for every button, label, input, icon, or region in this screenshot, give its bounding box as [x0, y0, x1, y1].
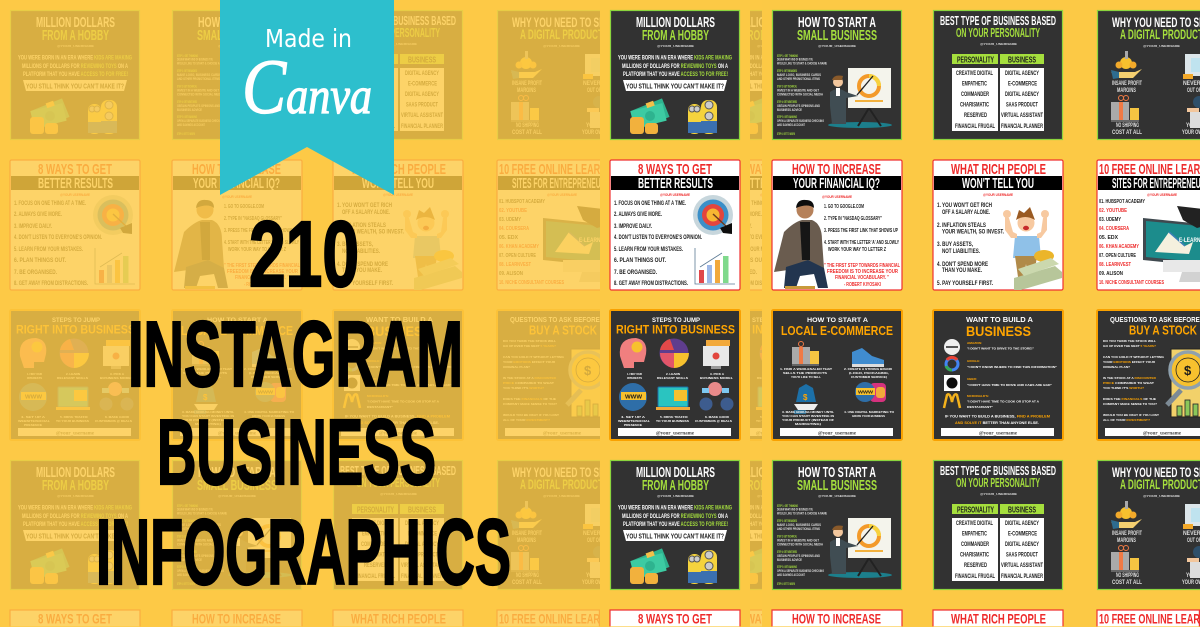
icon labels: PRESENCE	[624, 423, 642, 427]
question text: YOU THINK IT'S WORTH?	[1103, 386, 1144, 390]
icon labels: 3. PICK A	[710, 372, 724, 376]
step list: OPEN A SEPARATE BUSINESS CHECKING	[777, 119, 824, 123]
question text	[1103, 339, 1165, 422]
brand quotes: "I DON'T HAVE TIME TO COOK OR STOP AT A	[967, 400, 1040, 404]
numbered list: 5. LEARN FROM YOUR MISTAKES.	[614, 246, 683, 253]
icon labels: CUSTOMERS @ DEALS	[695, 419, 732, 423]
icon labels: MARGINS	[1117, 88, 1136, 94]
card heading: BEST TYPE OF BUSINESS BASED	[940, 13, 1056, 28]
table: personality and business: COMMANDER	[961, 92, 989, 98]
icon labels	[618, 372, 733, 427]
brand quotes: MCDONALD'S:	[967, 394, 989, 398]
photo: seated man in blazer	[774, 200, 828, 289]
card heading	[792, 161, 881, 192]
title: 210	[249, 202, 359, 306]
icon labels: WEBSITE/SOCIAL	[618, 419, 650, 423]
card: how to start a small business: @YOUR_USERNAME	[818, 44, 856, 48]
numbered list: OFF A SALARY ALONE.	[942, 209, 990, 216]
card heading: HOW TO START A	[807, 317, 868, 324]
card heading	[940, 13, 1056, 40]
card: best type of business based on your personality	[933, 10, 1063, 140]
step list: BUSINESS ADVICE	[777, 108, 802, 112]
numbered list: 2. ALWAYS GIVE MORE.	[614, 211, 662, 218]
quote: - ROBERT KIYOSAKI	[844, 282, 881, 288]
numbered list: 10. NICHE CONSULTANT COURSES	[1099, 280, 1164, 286]
card: how to start a local e-commerce	[772, 310, 902, 440]
icon: blue shoe	[852, 348, 884, 367]
icon labels: 2. LEARN	[666, 372, 680, 376]
table: personality and business: FINANCIAL FRUGAL	[955, 124, 995, 130]
icon: monitor	[1183, 54, 1200, 79]
ribbon logo text: canva: Canva	[242, 43, 372, 130]
numbered list: 8. GET AWAY FROM DISTRACTIONS.	[614, 280, 688, 287]
conclusion text: IF YOU WANT TO BUILD A BUSINESS, FIND A PROBLEM	[945, 414, 1050, 418]
body text: PLATFORM THAT YOU HAVE ACCESS TO FOR FREE!	[623, 71, 728, 78]
icon labels: 5. DRIVE TRAFFIC	[660, 415, 688, 419]
step list: STEP 2: GET BRANDED	[777, 69, 797, 73]
numbered list: 1. FOCUS ON ONE THING AT A TIME.	[614, 200, 686, 207]
card heading	[636, 14, 715, 44]
table: personality and business: EMPATHETIC	[962, 82, 987, 88]
step list: WOULD LIKE TO START & CHOOSE A NAME	[777, 62, 827, 66]
question text: ALL OF YOUR INVESTMENT?	[1103, 418, 1150, 422]
numbered list: 1. GO TO GOOGLE.COM	[824, 204, 864, 210]
body text	[618, 54, 732, 78]
card: million dollars from a hobby	[610, 10, 740, 140]
card heading	[1099, 161, 1200, 192]
card: best type of business based on your personality: @YOUR_USERNAME	[980, 42, 1017, 46]
card: how to increase your financial iq	[772, 160, 902, 290]
icon labels: INSANE PROFIT	[1112, 81, 1142, 87]
step text: YOU CAN START INVESTING IN	[782, 414, 834, 418]
table: personality and business: RESERVED	[964, 113, 987, 119]
step list: STEP 3: GET TECHNICAL	[777, 84, 797, 88]
numbered list: 01. HUBSPOT ACADEMY	[1099, 199, 1145, 205]
table: personality and business: E-COMMERCE	[1008, 82, 1037, 88]
title: INFOGRAPHICS	[96, 500, 511, 604]
step list: CONNECTED WITH SOCIAL MEDIA	[777, 92, 823, 96]
card heading: HOW TO START A	[798, 14, 876, 31]
brand quotes: RESTAURANT"	[967, 405, 994, 409]
step text: (LOGO, PACKAGING,	[849, 371, 889, 375]
numbered list	[1099, 199, 1164, 286]
icon: hand with coins	[1111, 51, 1142, 79]
card heading: WON'T TELL YOU	[962, 175, 1034, 192]
icon labels: 4. SET UP A	[621, 415, 645, 419]
cards: cropped heading row five	[610, 610, 1200, 626]
table: personality and business: CHARISMATIC	[960, 102, 989, 108]
table: personality and business: BUSINESS	[1008, 56, 1036, 64]
card heading: STEPS TO JUMP	[652, 317, 701, 324]
card heading: LOCAL E-COMMERCE	[781, 324, 893, 338]
step text: 3. MAKE ENOUGH MONEY UNTIL	[782, 410, 834, 414]
card: why you need to sell a digital product: @YOUR_USERNAME	[1143, 44, 1180, 48]
numbered list	[937, 202, 1004, 287]
icon row: head, puzzle, store	[620, 338, 730, 369]
question text: CAN YOU HOLD IT WITHOUT LETTING	[1103, 355, 1165, 359]
brand quotes: "I DON'T WANT TO DRIVE TO THE STORE!"	[967, 346, 1035, 350]
icon: person with laptop	[1187, 96, 1200, 128]
card heading	[781, 317, 893, 338]
numbered list: 2. TYPE IN "NASDAQ GLOSSARY"	[824, 216, 882, 222]
icon labels: NO SHIPPING	[1116, 123, 1139, 129]
step list	[777, 54, 827, 136]
step list: DESIGN WHAT KIND OF BUSINESS YOU	[777, 58, 813, 62]
numbered list: 7. BE ORGANISED.	[614, 269, 657, 276]
question text: YOUR EMOTIONS EFFECT YOUR	[1103, 360, 1156, 364]
icon labels: BUSINESS MODEL	[700, 376, 733, 380]
step list: STEP 6: GET TO WORK	[777, 132, 795, 136]
step list: STEP 4: GET MENTORED	[777, 100, 797, 104]
card: 8 ways to get better results: @YOUR USERNAME	[660, 193, 691, 197]
numbered list: 3. PRESS THE FIRST LINK THAT SHOWS UP	[824, 228, 898, 234]
step text: SELLS THE PRODUCTS	[783, 371, 827, 375]
card heading: YOUR FINANCIAL IQ?	[793, 175, 880, 192]
cards: repeated row four	[610, 460, 1200, 590]
brand quotes: "I DON'T KNOW WHERE TO FIND THIS INFORMATION"	[967, 365, 1058, 369]
numbered list: 3. BUY ASSETS,	[937, 241, 973, 248]
conclusion text	[945, 414, 1050, 425]
title	[96, 202, 511, 604]
question text: PRICE COMPARED TO WHAT	[1103, 381, 1154, 385]
card heading: ON YOUR PERSONALITY	[956, 25, 1040, 40]
username bar: @your_username	[979, 430, 1018, 436]
card: 10 free online learning sites	[1097, 160, 1200, 290]
card: why you need to sell a digital product	[1097, 10, 1200, 140]
question text: COMPANY MAKE SENSE TO YOU?	[1103, 402, 1157, 406]
card heading	[951, 161, 1046, 192]
brand quotes: UBER:	[967, 377, 977, 381]
card heading: FROM A HOBBY	[642, 27, 709, 44]
table: personality and business: DIGITAL AGENCY	[1005, 92, 1039, 98]
step list: AND SAVINGS ACCOUNT	[777, 123, 806, 127]
card heading	[966, 317, 1033, 339]
table: personality and business: CREATIVE DIGITAL	[956, 71, 993, 77]
icon: delivery truck	[792, 342, 819, 366]
card: 8 ways to get better results	[610, 160, 740, 290]
question text: IS THE STOCK AT A DISCOUNTED	[1103, 376, 1157, 380]
card heading: BETTER RESULTS	[638, 175, 713, 192]
question text: GO UP OVER THE NEXT 5 YEARS?	[1103, 344, 1156, 348]
table: personality and business: PERSONALITY	[957, 56, 994, 64]
numbered list: WORK YOUR WAY TO LETTER Z	[828, 247, 886, 253]
card heading: WHAT RICH PEOPLE	[951, 161, 1046, 178]
brand quotes: "I DON'T HAVE TIME TO DRIVE AND CABS ARE BAD"	[967, 383, 1053, 387]
cards: cropped heading row five: HOW TO INCREASE	[792, 610, 881, 626]
numbered list: 02. YOUTUBE	[1099, 208, 1127, 214]
quote	[824, 263, 900, 288]
icon: target with dart	[693, 195, 733, 235]
card heading: BUSINESS	[966, 323, 1031, 339]
card: steps to jump right into business	[610, 310, 740, 440]
numbered list: 07. OPEN CULTURE	[1099, 253, 1136, 259]
step text	[780, 367, 895, 426]
table: personality and business: SAAS PRODUCT	[1006, 102, 1038, 108]
icon: minions	[688, 100, 717, 134]
card: million dollars from a hobby: @YOUR_USERNAME	[657, 44, 694, 48]
card heading: RIGHT INTO BUSINESS	[616, 322, 735, 336]
numbered list: THAN YOU MAKE.	[942, 267, 982, 274]
numbered list	[614, 200, 702, 287]
username bar: @your_username	[1143, 430, 1182, 436]
numbered list: NOT LIABILITIES.	[942, 248, 980, 255]
cards: cropped heading row five: 8 WAYS TO GET	[638, 610, 712, 626]
icon: money and coins	[630, 98, 670, 134]
title: BUSINESS	[157, 400, 436, 504]
card: how to increase your financial iq: @YOUR USERNAME	[822, 195, 853, 199]
card heading: WANT TO BUILD A	[966, 317, 1033, 324]
brand quotes	[967, 341, 1058, 409]
numbered list: 4. DON'T LISTEN TO EVERYONE'S OPINION.	[614, 234, 702, 241]
table: personality and business	[952, 54, 1044, 131]
cards: cropped heading row five: WHAT RICH PEOPLE	[951, 610, 1046, 626]
numbered list: 03. UDEMY	[1099, 217, 1121, 223]
card heading	[638, 161, 713, 192]
card: want to build a business	[933, 310, 1063, 440]
card heading: 8 WAYS TO GET	[638, 161, 712, 178]
step text: 1. FIND A WHOLESALER THAT	[780, 367, 832, 371]
numbered list: 08. LEARNVEST	[1099, 262, 1131, 268]
username bar: @your_username	[818, 430, 857, 436]
table: personality and business: FINANCIAL PLANNER	[1001, 124, 1043, 130]
card: how to start a small business	[772, 10, 902, 140]
quote: " THE FIRST STEP TOWARDS FINANCIAL	[824, 263, 900, 269]
ribbon: made in canva	[220, 0, 394, 195]
callout banner: YOU STILL THINK YOU CAN'T MAKE IT?	[626, 82, 724, 90]
question text: ORIGINAL PLAN?	[1103, 365, 1130, 369]
card heading: HOW TO INCREASE	[792, 161, 881, 178]
step text: 4. USE DIGITAL MARKETING TO	[844, 410, 895, 414]
card heading	[616, 317, 735, 336]
icon: delivery truck	[1111, 96, 1139, 122]
ribbon text: made in: Made in	[265, 24, 352, 53]
numbered list: 4. START WITH THE LETTER 'A' AND SLOWLY	[824, 240, 899, 246]
icon labels: 1. FIND YOUR	[627, 372, 642, 376]
card: 10 free online learning sites: @YOUR USERNAME	[1147, 193, 1178, 197]
card heading: SMALL BUSINESS	[797, 27, 877, 44]
numbered list: 3. IMPROVE DAILY.	[614, 223, 652, 230]
step text: 2. CREATE A STRONG BRAND	[844, 367, 892, 371]
numbered list: 06. KHAN ACADEMY	[1099, 244, 1139, 250]
icon labels: TO YOUR BUSINESS	[656, 419, 689, 423]
step text: MARKETING)	[795, 422, 821, 426]
step text: CUSTOMER SERVICE)	[851, 375, 887, 379]
body text: MILLIONS OF DOLLARS FOR REVIEWING TOYS ON A	[622, 63, 728, 70]
question text: DOES THE FINANCIALS OF THE	[1103, 397, 1156, 401]
card heading	[1112, 14, 1200, 42]
numbered list: 09. ALISON	[1099, 271, 1123, 277]
icon: amazon, google, uber, mcdonalds logos	[944, 339, 960, 408]
card: what rich people won't tell you: @YOUR USERNAME	[983, 193, 1014, 197]
card: what rich people won't tell you	[933, 160, 1063, 290]
quote: FINANCIAL VOCABULARY. "	[835, 275, 889, 281]
icon labels: INTERESTS	[627, 376, 642, 380]
step list: OBTAIN PEOPLE'S OPINIONS AND	[777, 104, 820, 108]
icon: excited man with money	[1003, 207, 1062, 290]
icon: hand holding money bag: $	[803, 393, 808, 402]
card: questions to ask before you buy a stock	[1097, 310, 1200, 440]
icon labels: 6. MAKE GOOD	[705, 415, 729, 419]
step list: INVEST IN A WEBSITE AND GET	[777, 88, 820, 92]
numbered list: 5. PAY YOURSELF FIRST.	[937, 280, 993, 287]
brand quotes: GOOGLE:	[967, 359, 980, 363]
step text: YOU'D LIKE TO SELL	[791, 375, 821, 379]
numbered list: 4. DON'T SPEND MORE	[937, 261, 988, 268]
icon: magnifier over bar chart: $	[1184, 363, 1192, 378]
question text: WOULD YOU BE OKAY IF YOU LOST	[1103, 413, 1159, 417]
body text: YOU WERE BORN IN AN ERA WHERE KIDS ARE MAKING	[618, 54, 732, 62]
step list: MAKE LOGO, BUSINESS CARDS	[777, 73, 821, 77]
numbered list: 05. EDX	[1099, 235, 1118, 241]
panel: faded infographic grid behind the title	[0, 0, 627, 627]
step text: GROW YOUR BUSINESS	[852, 414, 885, 418]
card heading: MILLION DOLLARS	[636, 14, 715, 31]
numbered list: YOUR WEALTH, SO INVEST.	[942, 228, 1004, 236]
icon: www globe and instagram: WWW	[858, 390, 874, 394]
question text: DO YOU THINK THE STOCK WILL	[1103, 339, 1156, 343]
numbered list: 6. PLAN THINGS OUT.	[614, 257, 666, 264]
numbered list	[824, 204, 899, 253]
step list: AND OTHER PROMOTIONAL ITEMS	[777, 77, 820, 81]
step list: STEP 1: GET THINKING	[777, 54, 798, 58]
username bar: @your_username	[656, 430, 695, 436]
icon row: globe, laptop, customers: WWW	[625, 394, 642, 400]
panel: faded strip of cards between columns	[750, 10, 762, 626]
table: personality and business: VIRTUAL ASSISTANT	[1001, 113, 1043, 119]
numbered list: 1. YOU WON'T GET RICH	[937, 202, 992, 209]
card heading	[797, 14, 877, 44]
brand quotes: AMAZON:	[967, 341, 982, 345]
icon labels	[1112, 81, 1200, 136]
numbered list: 04. COURSERA	[1099, 226, 1129, 232]
numbered list: 2. INFLATION STEALS	[937, 222, 986, 229]
icon labels: COST AT ALL	[1112, 130, 1142, 136]
quote: FREEDOM IS TO INCREASE YOUR	[827, 269, 898, 275]
chart: rising bars	[695, 248, 735, 284]
panel: sharp infographic grid	[610, 10, 1200, 626]
table: personality and business: DIGITAL AGENCY	[1005, 71, 1039, 77]
conclusion text: AND SOLVE IT BETTER THAN ANYONE ELSE.	[955, 421, 1039, 425]
icon labels: RELEVANT SKILLS	[657, 376, 688, 380]
card heading	[1110, 317, 1200, 338]
step text: YOUR PRODUCT (INSTEAD OF	[782, 418, 834, 422]
title: INSTAGRAM	[128, 302, 463, 406]
step list: STEP 5: GET BANKING	[777, 115, 797, 119]
icon: presenter with board	[828, 68, 892, 128]
